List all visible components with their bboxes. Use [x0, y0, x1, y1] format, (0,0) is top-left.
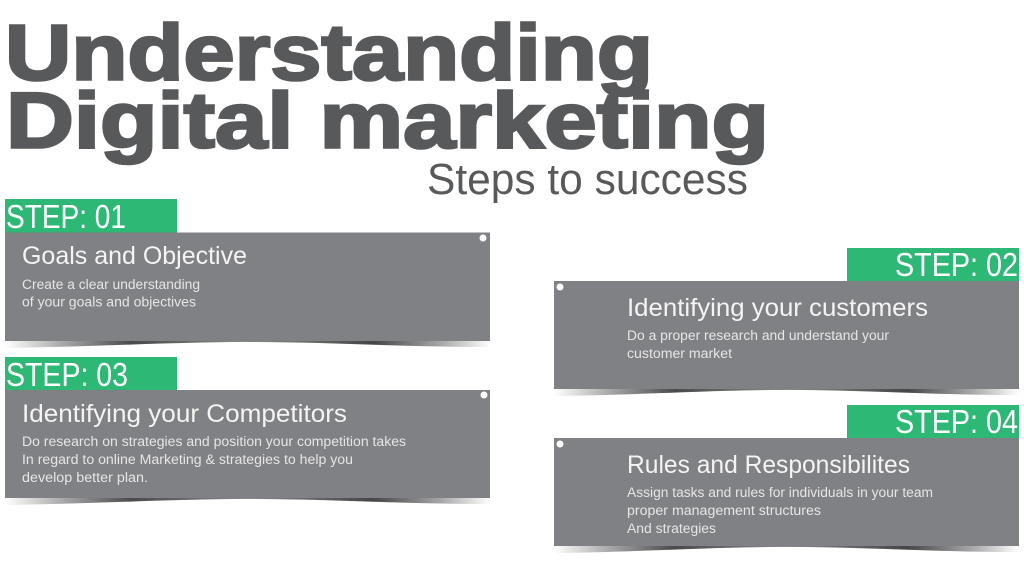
step 03 pin — [480, 392, 488, 398]
panel: step 03 — [5, 356, 490, 505]
step 01 body: Create a clear understanding — [22, 277, 200, 292]
step 03 shadow — [5, 498, 490, 505]
step 03 tab: STEP: 03 — [6, 356, 128, 393]
step 02 heading: Identifying your customers — [627, 294, 928, 322]
step 02 body: customer market — [627, 346, 732, 361]
step 03 heading: Identifying your Competitors — [22, 400, 347, 428]
step 03 body: Do research on strategies and position your competition takes — [22, 434, 406, 449]
step 04 card — [554, 438, 1019, 546]
title: Digital marketing — [6, 76, 769, 164]
step 02 body: Do a proper research and understand your — [627, 328, 890, 343]
step 01 heading: Goals and Objective — [22, 242, 247, 270]
step 02 shadow — [554, 389, 1019, 396]
step 01 card — [5, 232, 490, 341]
step 03 body: In regard to online Marketing & strategies to help you — [22, 452, 353, 467]
title: Understanding — [5, 8, 653, 96]
step 03 card — [5, 390, 490, 498]
step 02 card — [554, 281, 1019, 389]
subtitle: Steps to success — [427, 155, 748, 204]
step 04 heading: Rules and Responsibilites — [627, 451, 910, 479]
step 04 pin — [556, 440, 564, 448]
panel: step 04 — [554, 403, 1019, 553]
step 01 tab: STEP: 01 — [6, 198, 126, 235]
title — [5, 8, 769, 164]
step 02 body — [627, 328, 890, 361]
step 04 shadow — [554, 546, 1019, 553]
step 04 body: And strategies — [627, 521, 716, 536]
panel: step 02 — [554, 246, 1019, 396]
step 01 body — [22, 277, 200, 310]
step 01 body: of your goals and objectives — [22, 294, 196, 310]
step 04 body — [627, 485, 933, 536]
step 03 body — [22, 434, 406, 485]
step 03 body: develop better plan. — [22, 470, 148, 485]
step 01 pin — [480, 234, 486, 242]
step 01 shadow — [5, 341, 490, 348]
step 04 body: proper management structures — [627, 503, 821, 518]
step 04 body: Assign tasks and rules for individuals in your team — [627, 485, 933, 500]
panel: step 01 — [5, 198, 490, 348]
step 02 pin — [556, 284, 564, 290]
